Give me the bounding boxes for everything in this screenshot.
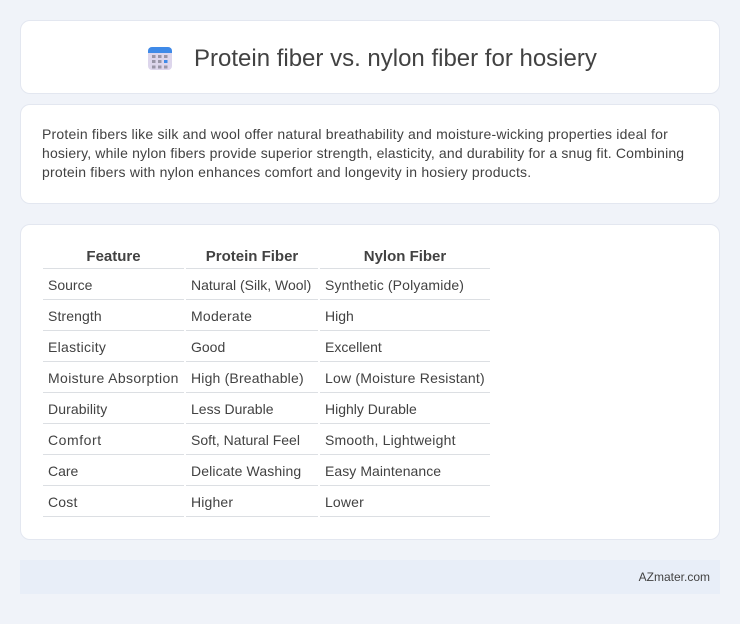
comparison table: Strength: [48, 308, 102, 324]
comparison table: Care: [48, 463, 78, 479]
panel: intro: [20, 104, 720, 204]
comparison table: Soft, Natural Feel: [191, 432, 300, 448]
title text: Protein fiber vs. nylon fiber for hosiery: [194, 45, 597, 72]
comparison table: Durability: [48, 401, 107, 417]
comparison table: [43, 248, 490, 517]
comparison table: Higher: [191, 494, 233, 510]
intro text: hosiery, while nylon fibers provide superior strength, elasticity, and durability for a snug fit. Combining: [42, 145, 684, 161]
comparison table: Highly Durable: [325, 401, 417, 417]
comparison table: Natural (Silk, Wool): [191, 277, 311, 293]
intro text: protein fibers with nylon enhances comfort and longevity in hosiery products.: [42, 164, 531, 180]
comparison table: Good: [191, 339, 225, 355]
comparison table: Source: [48, 277, 92, 293]
panel: comparison table: [20, 224, 720, 540]
panel: title: [20, 20, 720, 94]
footer credit: AZmater.com: [639, 570, 710, 584]
comparison table: Less Durable: [191, 401, 274, 417]
comparison table: Comfort: [48, 432, 102, 448]
comparison table: Excellent: [325, 339, 382, 355]
intro text: [42, 126, 684, 180]
comparison table: Synthetic (Polyamide): [325, 277, 464, 293]
comparison table: Delicate Washing: [191, 463, 301, 479]
table header: Feature: [86, 248, 141, 265]
comparison table: Low (Moisture Resistant): [325, 370, 485, 386]
comparison table: High: [325, 308, 354, 324]
comparison table: Lower: [325, 494, 364, 510]
comparison table: Easy Maintenance: [325, 463, 441, 479]
table header: Nylon Fiber: [364, 248, 446, 265]
comparison table: Elasticity: [48, 339, 106, 355]
footer bar: [20, 560, 720, 594]
table header: [86, 248, 446, 265]
comparison table: High (Breathable): [191, 370, 304, 386]
comparison table: Cost: [48, 494, 78, 510]
icon: calendar: [148, 47, 172, 70]
intro text: Protein fibers like silk and wool offer natural breathability and moisture-wicking properties ideal for: [42, 126, 668, 142]
table header: Protein Fiber: [206, 248, 298, 265]
comparison table: Moderate: [191, 308, 252, 324]
comparison table: Smooth, Lightweight: [325, 432, 456, 448]
comparison table: Moisture Absorption: [48, 370, 179, 386]
